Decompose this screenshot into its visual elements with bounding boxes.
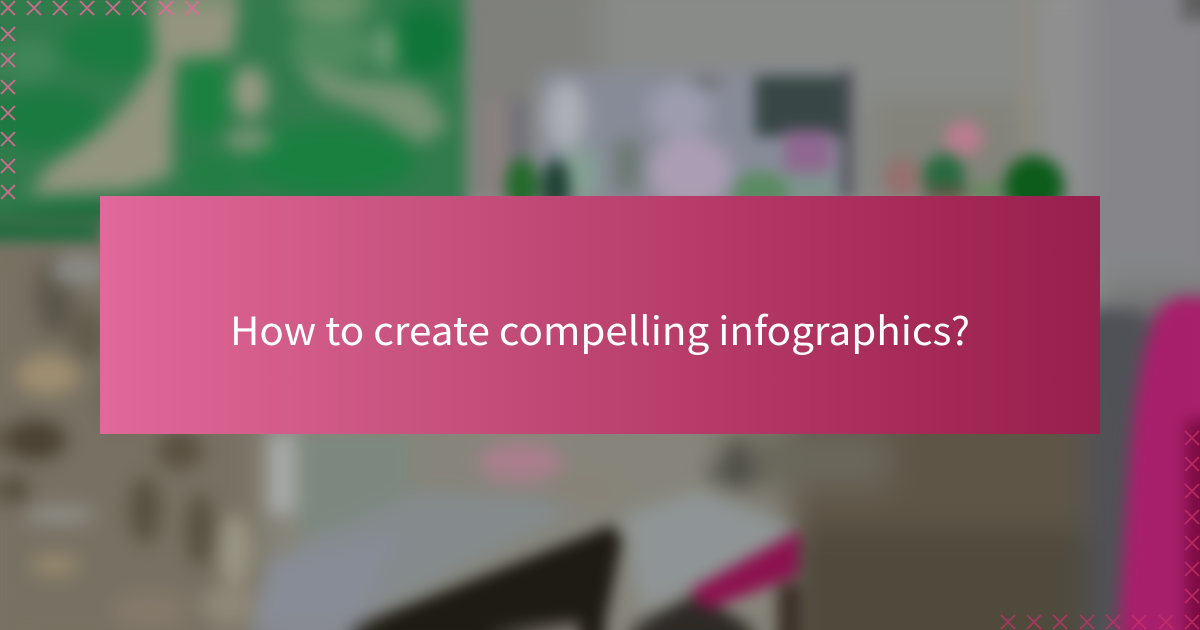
- green plant edge under the leaves: [0, 225, 100, 240]
- plant: large green leaves: [0, 0, 466, 242]
- wall: upper room: [460, 0, 1200, 330]
- wall: pale vertical strip: [1020, 0, 1030, 150]
- picture frame on the shelf: [540, 70, 852, 208]
- wall behind plant edge: [472, 0, 532, 196]
- textured rug at left: [1, 254, 260, 628]
- decorative x-mark pattern: bottom-right: [1001, 431, 1199, 629]
- heading: How to create compelling infographics?: [230, 301, 970, 357]
- coffee table and objects: [250, 434, 800, 630]
- potted plants on the shelf: [505, 121, 1064, 216]
- decorative x-mark pattern: top-left: [1, 1, 199, 199]
- lower room: floor and sofa: [0, 250, 1135, 630]
- wall: dark top-right corner: [1182, 0, 1200, 20]
- pink chair at right: [1118, 296, 1200, 630]
